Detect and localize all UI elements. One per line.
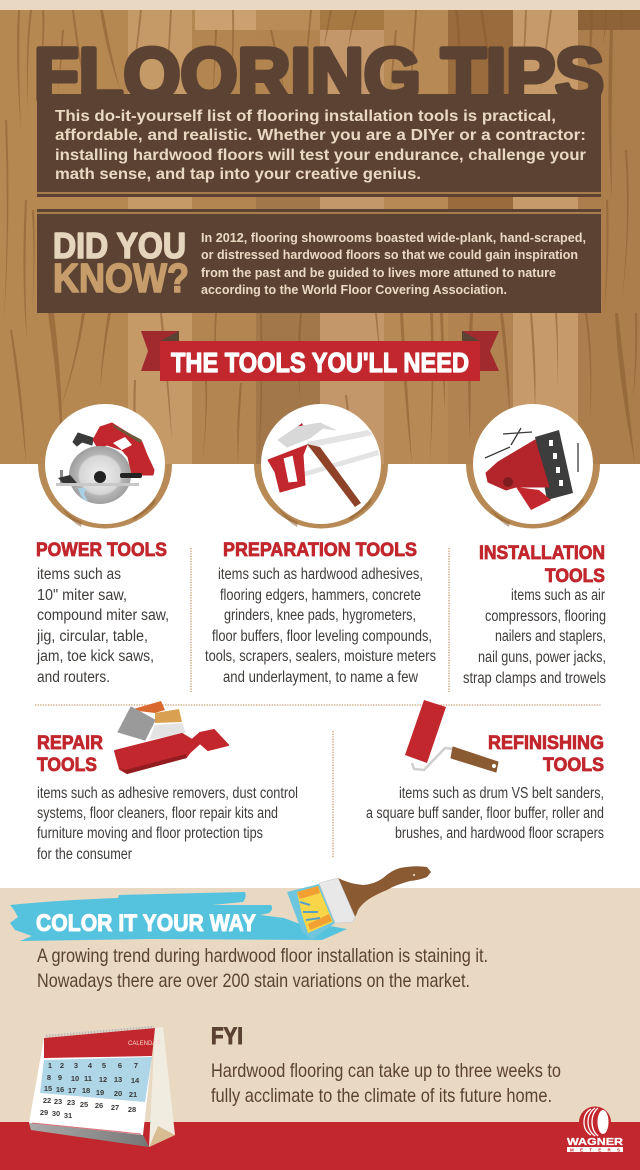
banner: the tools you'll need: THE TOOLS YOU'LL NEED bbox=[171, 347, 469, 378]
calendar numbers: 22 bbox=[43, 1096, 51, 1105]
calendar numbers: 10 bbox=[71, 1074, 79, 1083]
banner: the tools you'll need bbox=[141, 331, 499, 381]
calendar numbers: 23 bbox=[67, 1098, 75, 1107]
calendar numbers: 16 bbox=[56, 1085, 64, 1094]
calendar numbers: 6 bbox=[118, 1061, 122, 1070]
installation tools list bbox=[463, 587, 606, 687]
wood grain streaks bbox=[4, 10, 637, 464]
refinishing tools list bbox=[366, 785, 604, 842]
repair tools list: furniture moving and floor protection tips bbox=[37, 825, 263, 842]
heading: refinishing tools: REFINISHING bbox=[488, 733, 604, 754]
calendar numbers: 9 bbox=[58, 1073, 62, 1082]
text: stain trend: A growing trend during hardwood floor installation is staining it. bbox=[37, 945, 488, 967]
calendar numbers: 17 bbox=[68, 1086, 76, 1095]
heading: color it your way: COLOR IT YOUR WAY bbox=[36, 910, 256, 937]
power tools list: jam, toe kick saws, bbox=[36, 648, 154, 665]
heading: repair tools bbox=[37, 733, 103, 776]
heading: refinishing tools bbox=[488, 733, 604, 776]
repair tools list bbox=[37, 785, 298, 863]
heading: repair tools: TOOLS bbox=[37, 755, 97, 776]
icon: nail gun bbox=[466, 404, 600, 528]
heading: preparation tools: PREPARATION TOOLS bbox=[223, 540, 417, 561]
power tools list: compound miter saw, bbox=[37, 607, 169, 624]
heading: power tools: POWER TOOLS bbox=[36, 540, 167, 561]
calendar numbers: 20 bbox=[114, 1089, 122, 1098]
preparation tools list: flooring edgers, hammers, concrete bbox=[220, 587, 421, 604]
title: FLOORING TIPS bbox=[34, 33, 604, 116]
icon: paint roller bbox=[405, 700, 498, 772]
text: fyi note: fully acclimate to the climate of its future home. bbox=[211, 1085, 552, 1107]
blue paint stroke bbox=[10, 892, 347, 941]
intro text: installing hardwood floors will test your endurance, challenge your bbox=[55, 147, 586, 164]
icon: paint brush bbox=[287, 866, 431, 940]
installation tools list: compressors, flooring bbox=[485, 608, 606, 625]
did you know text: or distressed hardwood floors so that we could gain inspiration bbox=[201, 247, 578, 262]
preparation tools list: grinders, knee pads, hygrometers, bbox=[224, 607, 416, 624]
preparation tools list: tools, scrapers, sealers, moisture meters bbox=[205, 648, 436, 665]
heading: installation tools: INSTALLATION bbox=[479, 543, 605, 564]
white content area bbox=[0, 464, 640, 888]
calendar numbers: 27 bbox=[111, 1103, 119, 1112]
heading: fyi: FYI bbox=[211, 1023, 243, 1050]
icon: calendar bbox=[29, 1027, 175, 1147]
text: stain trend bbox=[37, 945, 488, 992]
calendar numbers: 14 bbox=[131, 1076, 140, 1085]
preparation tools list: and underlayment, to name a few bbox=[223, 669, 419, 686]
icon: hammer and hand saw bbox=[254, 404, 388, 528]
heading: refinishing tools: TOOLS bbox=[543, 755, 604, 776]
column: installation tools bbox=[463, 543, 606, 687]
column: preparation tools bbox=[205, 540, 436, 686]
power tools list: 10" miter saw, bbox=[37, 587, 127, 604]
installation tools list: strap clamps and trowels bbox=[463, 670, 606, 687]
calendar numbers: 26 bbox=[95, 1101, 103, 1110]
calendar numbers: 25 bbox=[80, 1100, 88, 1109]
did you know text: In 2012, flooring showrooms boasted wide-plank, hand-scraped, bbox=[201, 230, 586, 245]
calendar numbers: 1 bbox=[48, 1061, 52, 1070]
logo: wagner meters: METERS bbox=[570, 1148, 620, 1152]
calendar numbers: 18 bbox=[82, 1086, 90, 1095]
icon: calendar: CALENDAR bbox=[128, 1041, 161, 1047]
wood plank background bbox=[0, 10, 640, 464]
heading: installation tools bbox=[479, 543, 605, 587]
power tools list: jig, circular, table, bbox=[36, 628, 148, 645]
text: stain trend: Nowadays there are over 200 stain variations on the market. bbox=[37, 970, 470, 992]
text: fyi note: Hardwood flooring can take up to three weeks to bbox=[211, 1060, 561, 1082]
footer bar bbox=[0, 1122, 640, 1170]
column: repair tools bbox=[37, 733, 298, 863]
panel: did you know bbox=[37, 209, 601, 313]
calendar numbers: 3 bbox=[74, 1061, 78, 1070]
calendar numbers: 29 bbox=[40, 1108, 48, 1117]
column: refinishing tools bbox=[366, 733, 604, 842]
preparation tools list: items such as hardwood adhesives, bbox=[218, 566, 423, 583]
repair tools list: items such as adhesive removers, dust control bbox=[37, 785, 298, 802]
installation tools list: items such as air bbox=[511, 587, 605, 604]
panel: intro bbox=[37, 94, 601, 197]
intro text: affordable, and realistic. Whether you are a DIYer or a contractor: bbox=[55, 127, 586, 144]
calendar numbers: 28 bbox=[128, 1105, 136, 1114]
calendar numbers: 23 bbox=[54, 1097, 62, 1106]
top beige strip bbox=[0, 0, 640, 10]
did you know heading: KNOW? bbox=[53, 255, 189, 301]
icon: trowel and sponges bbox=[115, 701, 228, 774]
calendar numbers: 12 bbox=[99, 1075, 107, 1084]
installation tools list: nail guns, power jacks, bbox=[478, 649, 606, 666]
beige section background bbox=[0, 888, 640, 1122]
icon: circular saw bbox=[38, 404, 172, 528]
calendar numbers: 19 bbox=[96, 1088, 104, 1097]
repair tools list: for the consumer bbox=[37, 846, 132, 863]
calendar numbers: 5 bbox=[102, 1061, 106, 1070]
preparation tools list bbox=[205, 566, 436, 686]
intro text: math sense, and tap into your creative genius. bbox=[55, 166, 421, 183]
did you know heading bbox=[53, 225, 189, 301]
calendar numbers: 31 bbox=[64, 1111, 72, 1120]
installation tools list: nailers and staplers, bbox=[495, 628, 606, 645]
preparation tools list: floor buffers, floor leveling compounds, bbox=[212, 628, 432, 645]
text: fyi note bbox=[211, 1060, 561, 1107]
column: power tools bbox=[36, 540, 169, 686]
calendar numbers: 15 bbox=[44, 1084, 52, 1093]
did you know heading: DID YOU bbox=[53, 225, 186, 266]
power tools list: and routers. bbox=[37, 669, 110, 686]
calendar numbers: 8 bbox=[47, 1073, 51, 1082]
heading: repair tools: REPAIR bbox=[37, 733, 103, 754]
heading: installation tools: TOOLS bbox=[545, 566, 605, 587]
calendar numbers: 7 bbox=[134, 1061, 138, 1070]
calendar numbers: 21 bbox=[129, 1090, 137, 1099]
did you know text: from the past and be guided to lives more attuned to nature bbox=[201, 265, 556, 280]
calendar numbers: 4 bbox=[88, 1061, 93, 1070]
calendar numbers: 11 bbox=[84, 1074, 92, 1083]
did you know text bbox=[201, 230, 586, 297]
power tools list: items such as bbox=[37, 566, 121, 583]
intro text: This do-it-yourself list of flooring installation tools is practical, bbox=[55, 108, 556, 125]
calendar numbers: 13 bbox=[114, 1075, 122, 1084]
calendar numbers: 30 bbox=[52, 1109, 60, 1118]
calendar numbers bbox=[40, 1061, 140, 1120]
calendar numbers: 2 bbox=[60, 1061, 64, 1070]
intro text bbox=[55, 108, 586, 183]
power tools list bbox=[36, 566, 169, 686]
logo: wagner meters: WAGNER bbox=[567, 1137, 624, 1148]
repair tools list: systems, floor cleaners, floor repair kits and bbox=[37, 805, 278, 822]
logo: wagner meters bbox=[567, 1106, 624, 1152]
did you know text: according to the World Floor Covering Association. bbox=[201, 282, 507, 297]
